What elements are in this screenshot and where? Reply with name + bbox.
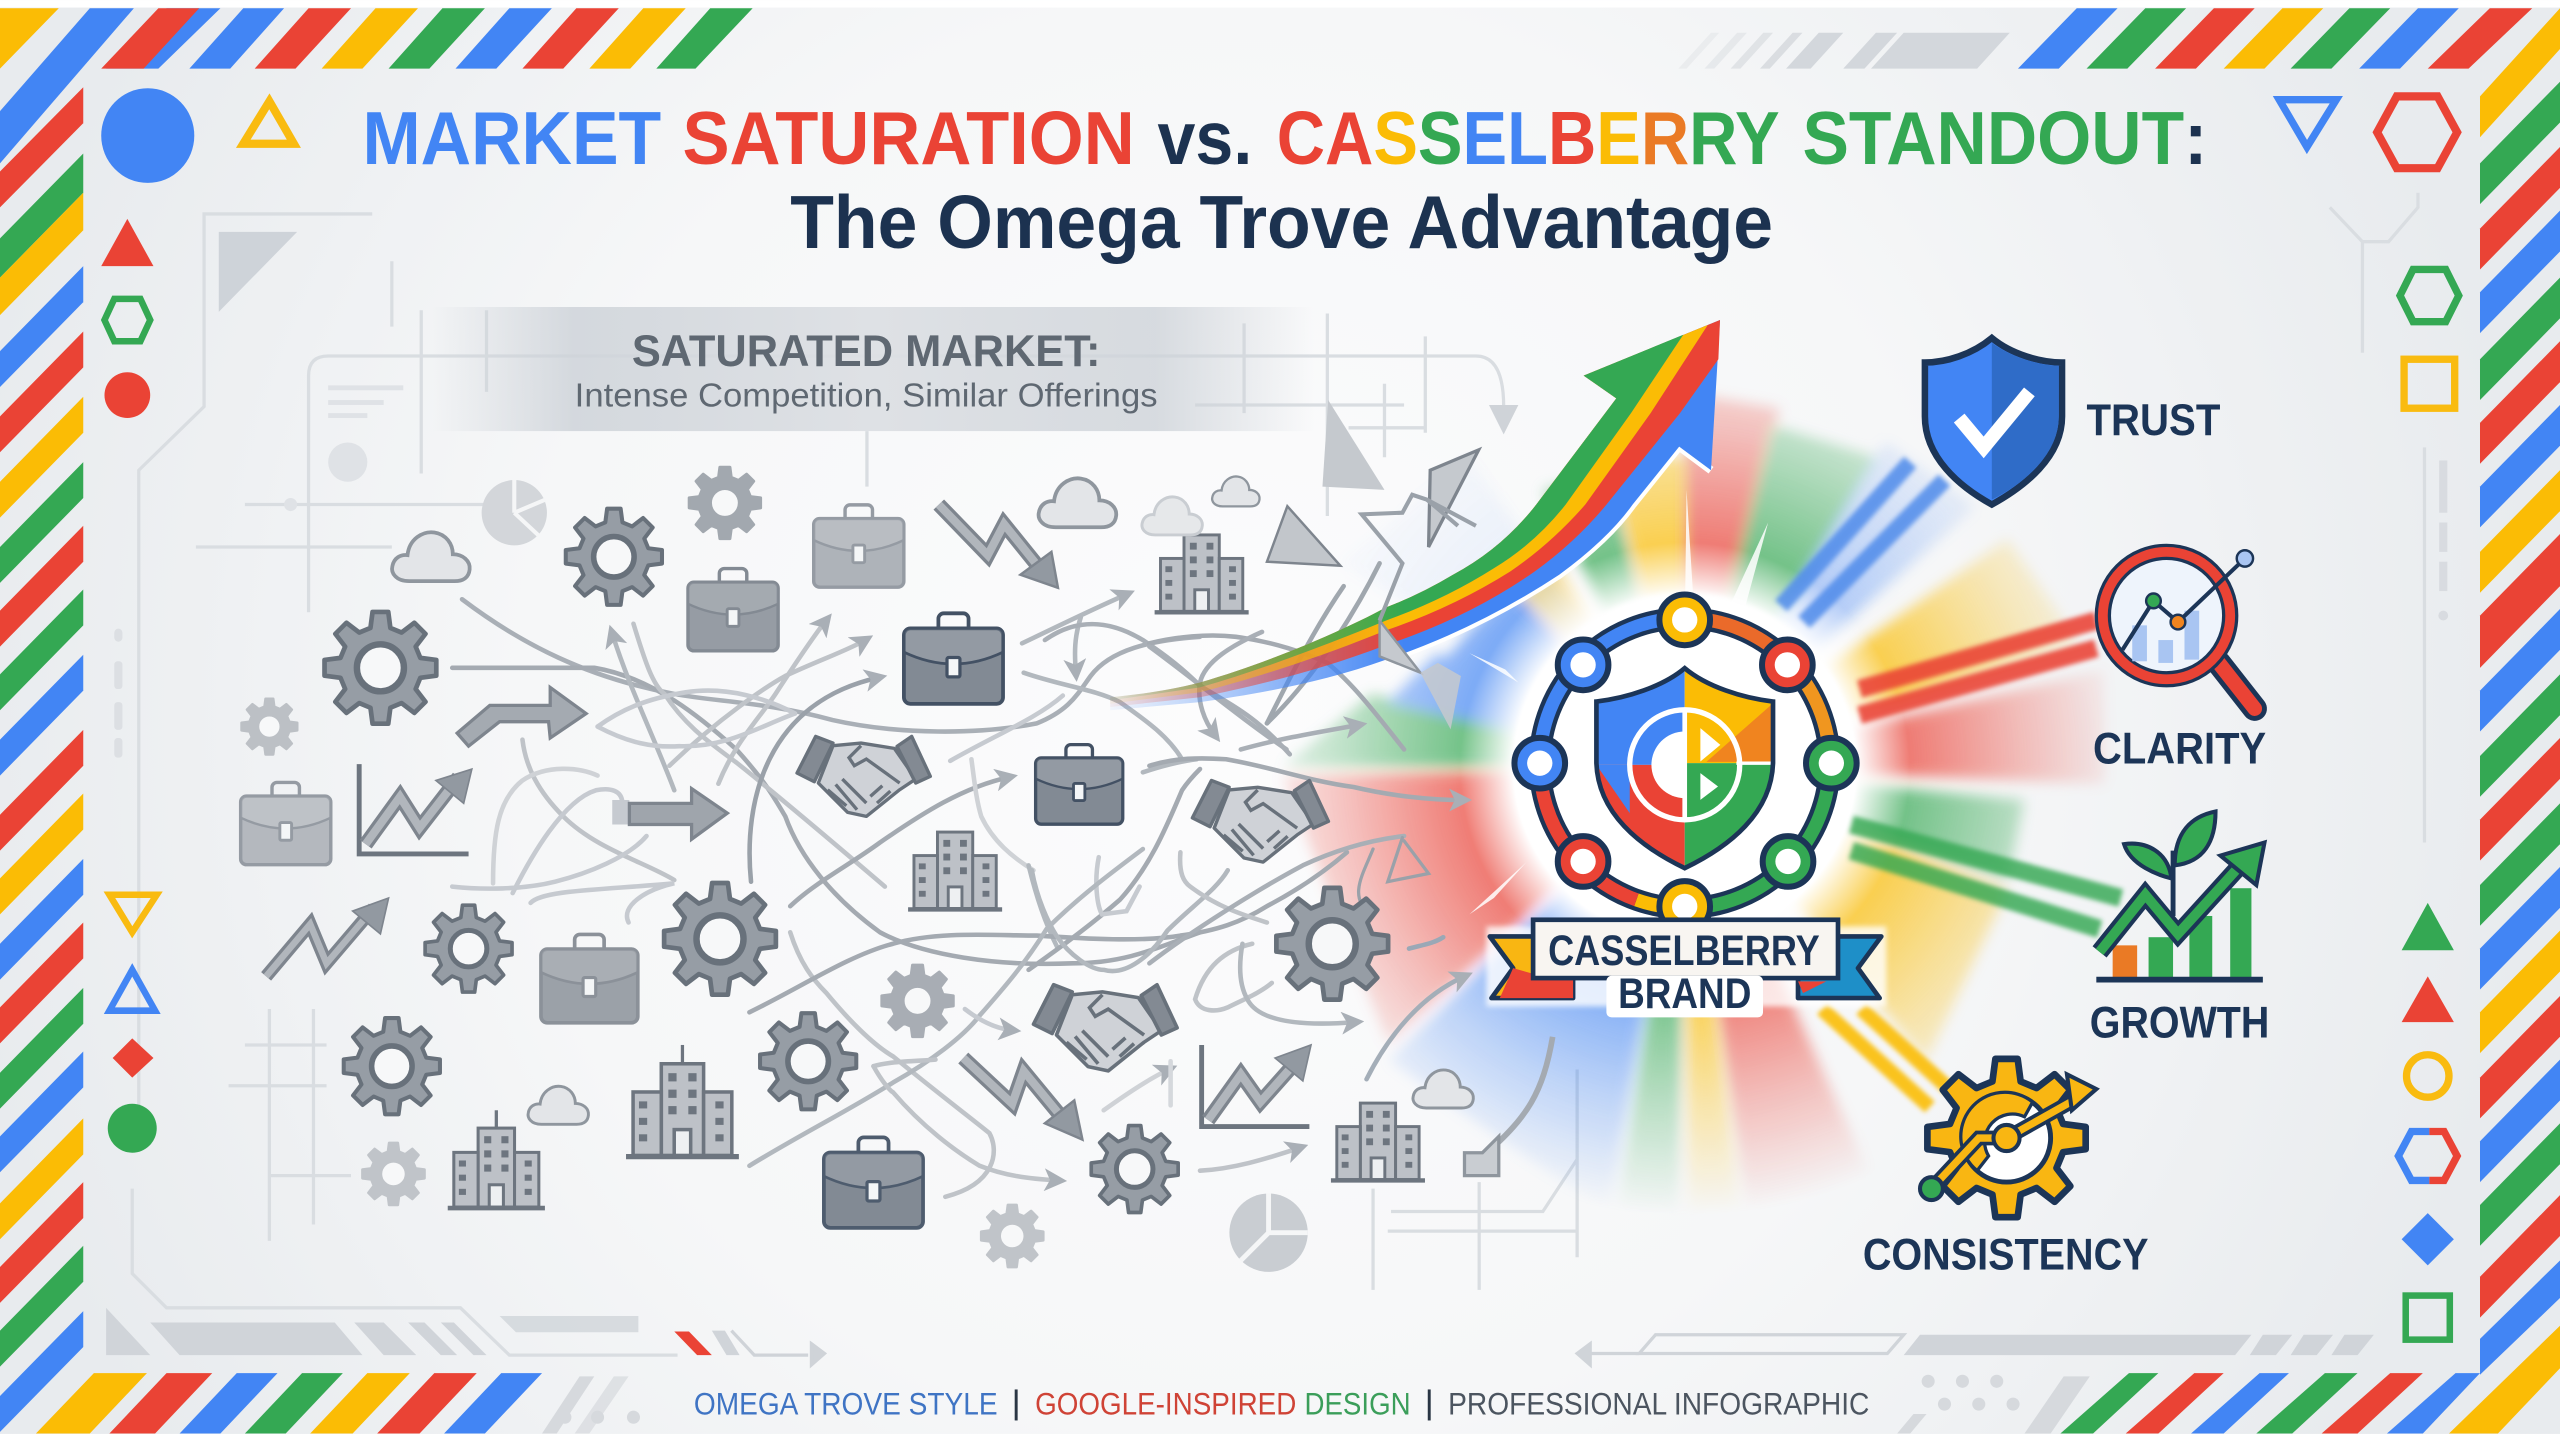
footer: professional infographic: PROFESSIONAL INFOGRAPHIC [1448,1387,1869,1422]
briefcase [688,569,778,651]
label: consistency: CONSISTENCY [1863,1230,2149,1279]
briefcase [241,782,331,865]
right bottom shapes [2398,903,2457,1340]
gear [1276,888,1388,1000]
icon: zigzag down arrow [963,1058,1082,1140]
icon: small connector box [1464,1037,1553,1176]
decorative dots left [114,629,122,758]
emblem nodes [1514,595,1857,932]
handshake [1033,985,1177,1071]
title word: SATURATION: SATURATION [682,96,1135,180]
shape: blue triangle [109,970,155,1011]
briefcase [541,934,638,1023]
shape: yellow inverted triangle [109,895,157,932]
right top shapes [2279,96,2459,408]
frame: bottom-right stripes [2060,1373,2480,1434]
gear [241,699,297,755]
white light streaks [1469,490,1768,914]
shape: red diamond [113,1038,153,1078]
gray bars bottom left [106,1308,740,1355]
building with antenna [448,1110,545,1208]
big rising arrow [1110,320,1720,710]
icon: clouds [392,476,1473,1124]
emblem label: CASSELBERRY [1548,927,1820,975]
shape: blue and red hexagon [2398,1131,2457,1180]
icon: pie chart [1229,1194,1308,1272]
icon: growth chart [2096,811,2264,980]
cloud [1413,1070,1473,1108]
building [1331,1103,1425,1180]
icon: handshakes [797,736,1328,1071]
label: trust: TRUST [2087,396,2220,445]
footer: google-inspired: GOOGLE-INSPIRED [1035,1387,1296,1422]
top white edge [0,0,2560,8]
icon: rising chart [359,764,472,854]
shape: green hexagon [104,299,150,341]
left bottom shapes [108,895,157,1153]
frame: left stripes [0,87,83,1432]
icon: trust shield [1925,338,2062,505]
label: clarity: CLARITY [2093,724,2266,773]
label: growth: GROWTH [2090,999,2269,1048]
gear [882,965,953,1037]
cloud [392,532,470,581]
emblem ring [1540,618,1830,908]
arrow band: yellow [1110,325,1708,704]
wireframe down arrow [1489,405,1518,434]
footer [694,1387,1869,1422]
icon: right arrow [612,789,727,839]
icon: pie chart [482,480,547,545]
title word: CASSELBERRY: CASSELBERRY [1277,96,1780,180]
handshake [1192,780,1328,862]
cloud [528,1086,588,1124]
icon: clarity magnifier [2103,550,2255,709]
saturated market banner [433,307,1314,431]
subtitle: The Omega Trove Advantage [790,180,1773,264]
gray bars bottom right [1577,1335,2374,1365]
shape: yellow circle [2407,1055,2449,1097]
shape: green square [2406,1296,2450,1340]
briefcase [824,1137,923,1228]
frame: top-right stripes [2018,8,2532,69]
footer: omega trove style: OMEGA TROVE STYLE [694,1387,998,1422]
building with antenna [626,1045,739,1157]
gear [425,905,512,992]
emblem shield [1596,668,1773,868]
bottom-left small arrow [731,1331,824,1365]
handshake [797,736,930,816]
gear [760,1013,856,1109]
emblem glow [1515,593,1855,933]
shape: blue diamond [2402,1213,2454,1265]
cloud [1212,476,1260,506]
title word: vs.: vs. [1158,96,1252,180]
gray bars top right [1678,33,2010,69]
beam: red to magnifier [1860,620,2096,715]
footer dot pattern right [1897,1375,2090,1434]
briefcase [814,505,904,587]
icon: rising chart [1202,1045,1311,1127]
shape: green hexagon [2400,269,2459,322]
shape: red triangle [2402,976,2454,1022]
title word: STANDOUT: STANDOUT: [1802,96,2207,180]
shape: red circle [104,372,150,418]
wireframe document icon [284,385,403,511]
frame: top-left stripes [0,8,753,163]
cloud [1142,497,1202,535]
shape: blue circle [101,88,194,183]
red accent slash [674,1331,712,1355]
shape: green circle [108,1104,157,1153]
arrow band: red [1110,320,1720,707]
gear [664,883,776,995]
cloud [1039,478,1116,527]
emblem CB monogram [1630,710,1772,820]
footer divider [1015,1389,1018,1420]
gear [1091,1126,1178,1212]
arrow halo [1386,447,1711,660]
gear [689,467,761,539]
decorative gray triangle [219,232,297,312]
gear [981,1205,1043,1267]
decorative dashes right [2438,460,2448,620]
shape: yellow triangle [243,101,294,144]
arrow band: green [1110,335,1683,700]
beam: green to growth [1851,825,2121,929]
shape: blue inverted triangle [2279,100,2336,147]
frame: bottom-left stripes [36,1373,542,1434]
footer: design: DESIGN [1304,1387,1411,1422]
gear [566,509,662,605]
arrow band: blue [1110,320,1720,710]
building [1155,535,1249,612]
emblem: Casselberry brand [1486,593,1886,1018]
title word: MARKET: MARKET [362,96,661,180]
icon: gears [241,467,1388,1267]
beam: blue to shield [1781,462,1944,622]
banner heading: SATURATED MARKET: [632,327,1100,376]
shape: yellow square [2404,359,2455,408]
shape: red triangle [101,219,153,266]
banner subheading: Intense Competition, Similar Offerings [575,378,1158,415]
icon: zigzag down arrow [939,505,1058,588]
tangled arrows [452,563,1464,1197]
briefcase [1036,745,1123,824]
icon: zigzag up arrow [266,898,389,976]
emblem label: BRAND [1618,970,1751,1018]
gear [362,1143,425,1205]
radiating colour rays [1282,392,2106,1216]
left top shapes [101,88,294,418]
briefcase [904,613,1003,704]
shape: red hexagon [2377,96,2457,168]
footer dot pattern left [542,1376,640,1434]
gear [325,612,436,724]
gear [344,1018,440,1114]
title [362,96,2207,264]
building [908,832,1002,909]
icon: buildings [448,535,1425,1208]
frame: right stripes [2449,8,2560,1434]
white core glow [1460,542,1910,993]
shape: green triangle [2402,903,2454,950]
shattered barrier [1267,400,1479,729]
beam: yellow to gear [1822,1009,1949,1107]
icon: consistency gear [1920,1059,2096,1217]
background wireframe lines [132,193,2424,1355]
footer divider [1428,1389,1431,1420]
emblem ribbon [1486,920,1886,1018]
icon: bent right arrow [457,687,586,746]
icon: briefcases [241,505,1123,1228]
